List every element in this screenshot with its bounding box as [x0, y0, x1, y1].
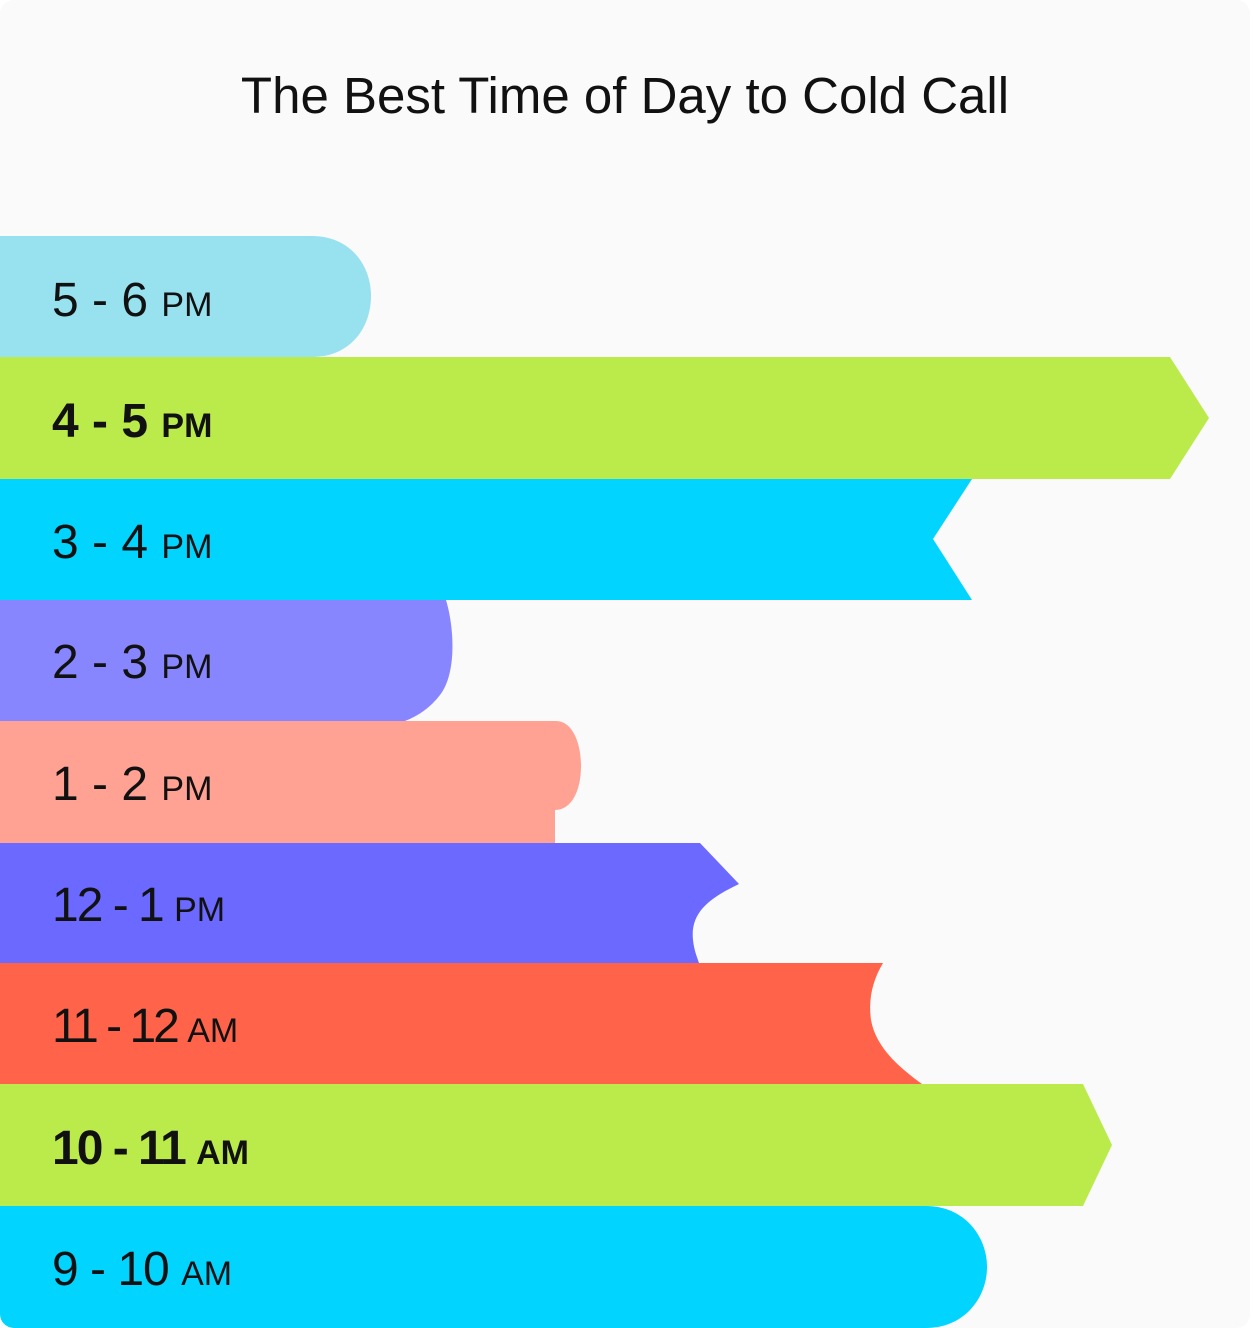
bar: 5-6 PM: 5 - 6 PM [52, 274, 212, 327]
bar: 12-1 PM [0, 843, 739, 963]
title: The Best Time of Day to Cold Call [241, 67, 1009, 124]
bar: 3-4 PM [0, 479, 972, 600]
bar: 4-5 PM [0, 357, 1209, 479]
bar: 11-12 AM [0, 963, 922, 1084]
bar: 5-6 PM [0, 236, 371, 357]
bar: 3-4 PM: 3 - 4 PM [52, 516, 212, 569]
bar: 1-2 PM: 1 - 2 PM [52, 758, 212, 811]
bar: 2-3 PM [0, 600, 452, 721]
bar: 9-10 AM: 9 - 10 AM [52, 1243, 232, 1296]
bar: 1-2 PM [0, 721, 581, 843]
bar: 11-12 AM: 11 - 12 AM [52, 1000, 238, 1053]
bar: 12-1 PM: 12 - 1 PM [52, 879, 225, 932]
bar: 4-5 PM: 4 - 5 PM [52, 395, 212, 448]
bar: 9-10 AM [0, 1206, 987, 1328]
bar: 10-11 AM [0, 1084, 1112, 1206]
bar: 10-11 AM: 10 - 11 AM [52, 1122, 249, 1175]
bar: 2-3 PM: 2 - 3 PM [52, 636, 212, 689]
